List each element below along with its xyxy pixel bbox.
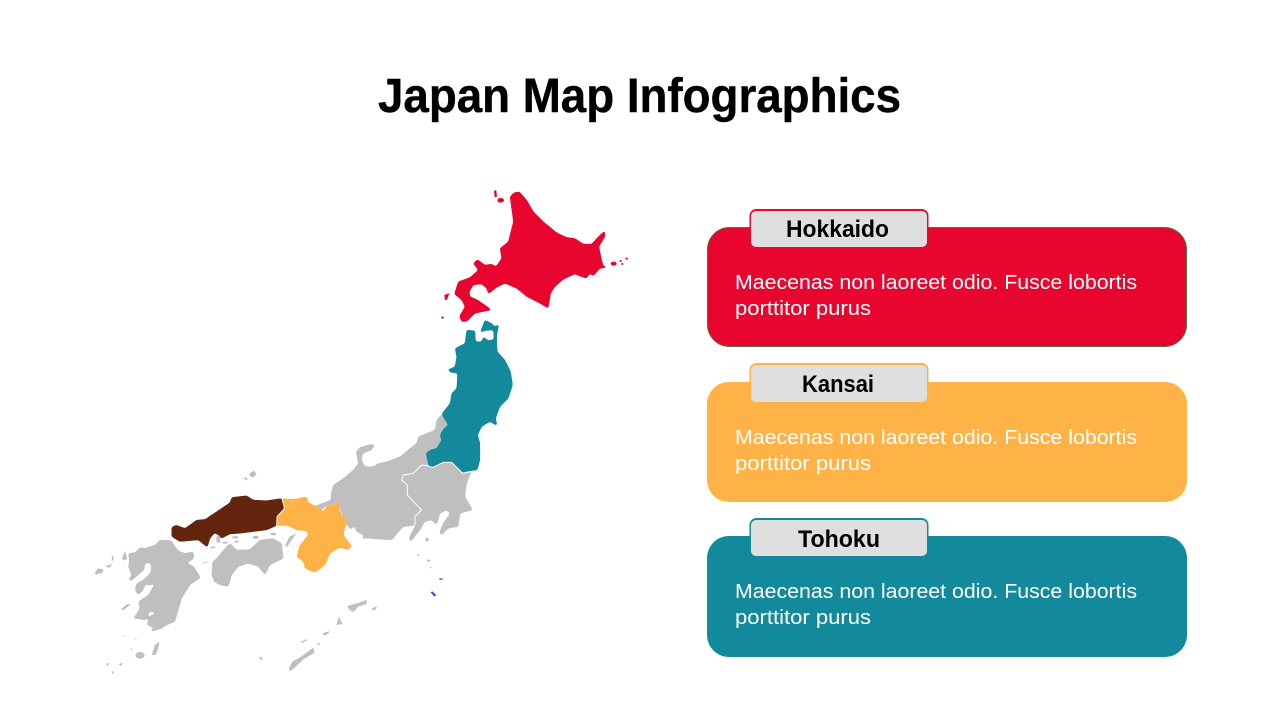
- region: Tohoku: [426, 320, 513, 473]
- region: Kansai: [277, 497, 352, 573]
- text block line 2: porttitor purus: [735, 607, 871, 629]
- text block: Maecenas non laoreet odio. Fusce lobortis: [735, 427, 1137, 449]
- text block: Maecenas non laoreet odio. Fusce lobortis: [735, 581, 1137, 603]
- region: Kyushu: [95, 540, 201, 675]
- panel: Hokkaido: [708, 209, 1186, 346]
- panel body: [707, 536, 1187, 657]
- map of Japan: [95, 190, 628, 675]
- panel body: [707, 382, 1187, 502]
- region: Chugoku: [172, 496, 284, 547]
- panel body: [708, 228, 1186, 346]
- tab: Kansai: [750, 363, 928, 403]
- panel: Tohoku: [707, 518, 1187, 657]
- region boundary lines: [402, 465, 429, 525]
- heading: Tohoku: [798, 526, 880, 553]
- text block: Maecenas non laoreet odio. Fusce lobortis: [735, 272, 1137, 294]
- region: Shikoku: [201, 471, 377, 671]
- text block line 2: porttitor purus: [735, 453, 871, 475]
- heading: Kansai: [802, 371, 874, 398]
- title: Japan Map Infographics: [378, 70, 901, 123]
- heading: Hokkaido: [786, 216, 889, 243]
- tab: Hokkaido: [750, 209, 928, 248]
- region: Kanto: [402, 462, 473, 568]
- text block line 2: porttitor purus: [735, 298, 871, 320]
- panel: Kansai: [707, 363, 1187, 502]
- region: Hokkaido: [444, 190, 628, 322]
- tab: Tohoku: [750, 518, 928, 557]
- region: Chubu: [313, 414, 448, 540]
- small outlying islands: [430, 316, 444, 596]
